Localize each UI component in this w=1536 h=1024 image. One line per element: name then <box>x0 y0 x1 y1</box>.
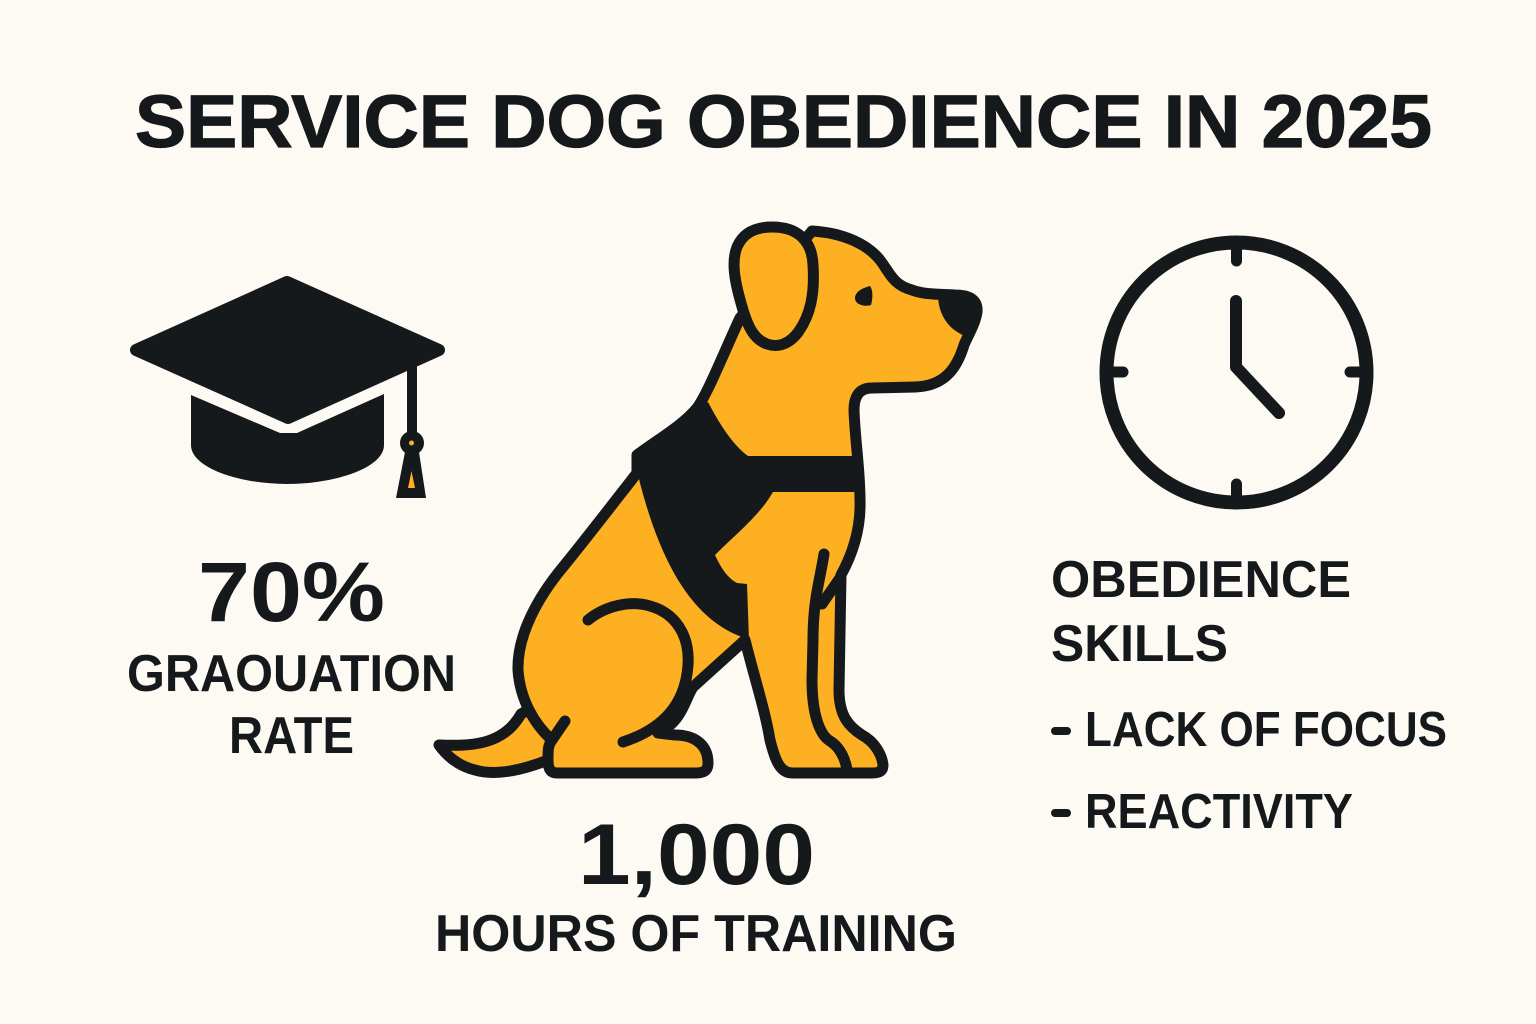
list item: reactivity: REACTIVITY <box>1085 785 1353 839</box>
text block: obedience skills: OBEDIENCE <box>1051 551 1351 609</box>
dog body <box>518 231 977 773</box>
dog front leg lines <box>812 554 847 771</box>
stat: graduation rate: 70% <box>198 545 385 639</box>
stat: graduation rate <box>127 545 456 765</box>
stat: hours of training: 1,000 <box>578 807 815 903</box>
text block: obedience skills: SKILLS <box>1051 615 1228 673</box>
list item: lack of focus: LACK OF FOCUS <box>1085 703 1447 757</box>
icon: clock <box>1106 242 1366 502</box>
stat: graduation rate: GRAOUATION <box>127 645 456 703</box>
stat: hours of training: HOURS OF TRAINING <box>435 905 957 963</box>
dog ear <box>734 227 813 345</box>
icon: graduation cap <box>136 282 439 498</box>
stat: graduation rate: RATE <box>229 707 354 765</box>
title: SERVICE DOG OBEDIENCE IN 2025 <box>135 80 1432 163</box>
illustration: seated service dog <box>439 227 979 773</box>
dog haunch line <box>588 604 688 742</box>
dog harness <box>637 402 860 640</box>
dog hind toe line <box>552 721 565 740</box>
dog eye <box>855 286 872 306</box>
dog tail <box>439 700 575 773</box>
stat: hours of training <box>435 807 957 963</box>
text block: obedience skills <box>1051 551 1447 839</box>
dog nose <box>938 293 979 336</box>
